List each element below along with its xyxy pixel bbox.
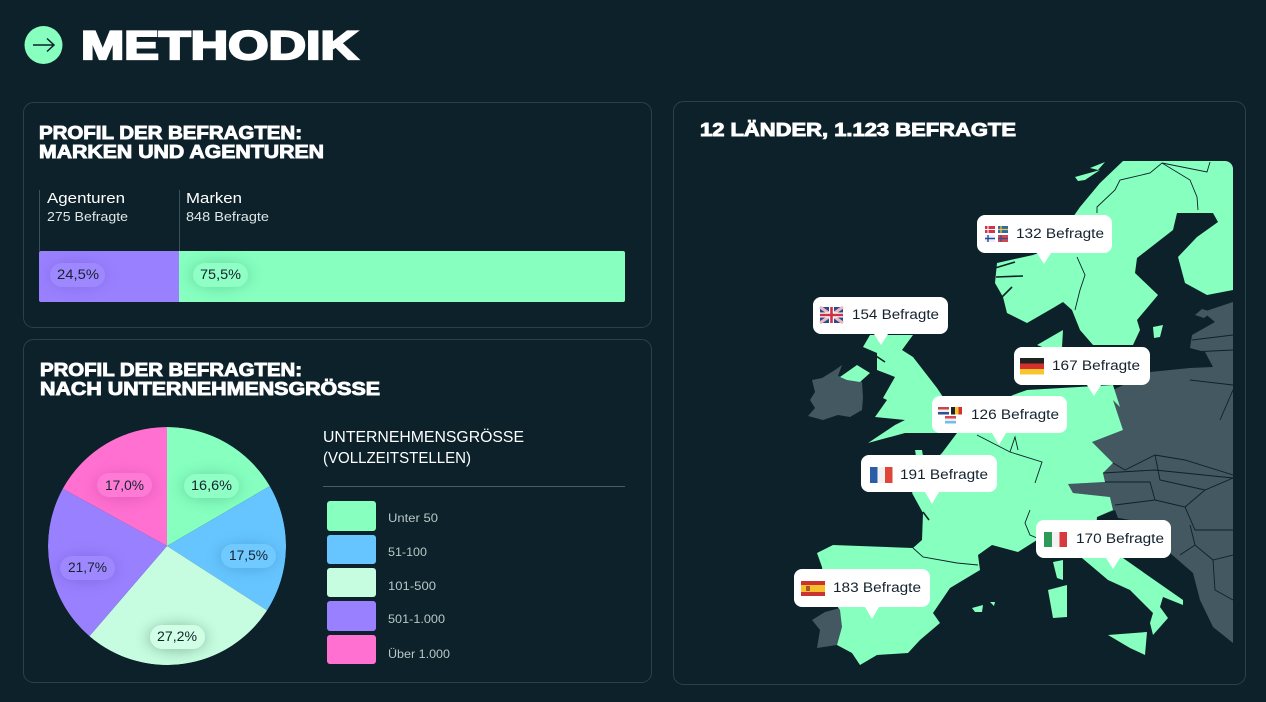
fjords and coastline inlets	[876, 262, 1023, 520]
legend	[323, 428, 625, 664]
value: 101-500: 27,2%	[157, 628, 197, 644]
legend item: 101-500: 101-500	[388, 579, 436, 593]
heading: company size	[40, 360, 380, 399]
panel: map	[674, 102, 1246, 684]
label: brands: Marken	[186, 190, 242, 207]
label: brands: 848 Befragte	[186, 209, 269, 224]
flag: Italy	[1044, 532, 1067, 547]
callout: Benelux	[932, 396, 1067, 445]
legend title	[323, 428, 625, 486]
panel: brands and agencies	[24, 102, 652, 328]
callout: Germany	[1014, 347, 1150, 396]
legend item: under 50: Unter 50	[388, 511, 438, 525]
callout: Nordics: 132 Befragte	[1016, 226, 1104, 241]
heading: brands and agencies: PROFIL DER BEFRAGTEN:	[39, 123, 302, 143]
panel: company size	[24, 340, 652, 682]
label: agencies: Agenturen	[47, 190, 125, 207]
callout: United Kingdom: 154 Befragte	[852, 307, 939, 322]
country borders	[913, 162, 1233, 600]
heading: brands and agencies	[39, 123, 324, 162]
legend title: (VOLLZEITSTELLEN)	[323, 450, 471, 467]
value: 501-1000	[60, 556, 115, 580]
label: agencies	[40, 190, 128, 251]
title: METHODIK	[81, 24, 358, 68]
dark sea north of Italy	[1098, 510, 1118, 518]
callout: France: 191 Befragte	[900, 467, 988, 482]
legend item: 51-100	[327, 535, 427, 564]
stacked bar chart	[39, 251, 625, 302]
label: brands	[180, 190, 269, 251]
flag: France	[870, 467, 892, 483]
surveyed countries	[817, 161, 1240, 665]
value: 501-1000: 21,7%	[68, 559, 107, 575]
legend item: 101-500	[327, 568, 436, 597]
callout: Spain	[794, 569, 930, 619]
callout: Italy: 170 Befragte	[1076, 531, 1164, 546]
value: 101-500	[150, 625, 205, 649]
map of Europe	[808, 161, 1240, 665]
value: over 1000: 17,0%	[105, 477, 144, 493]
heading: brands and agencies: MARKEN UND AGENTUREN	[39, 142, 324, 162]
callout: Germany: 167 Befragte	[1052, 358, 1140, 373]
flag: Spain	[801, 581, 825, 596]
value: over 1000	[97, 473, 152, 497]
value: agencies share: 24,5%	[57, 266, 99, 282]
legend item: 501-1000	[327, 601, 445, 631]
heading: company size: NACH UNTERNEHMENSGRÖSSE	[40, 379, 380, 399]
value: under 50: 16,6%	[191, 477, 232, 493]
pie chart	[48, 427, 286, 665]
value: 51-100	[221, 544, 276, 568]
heading: countries and respondents: 12 LÄNDER, 1.123 BEFRAGTE	[700, 120, 1016, 140]
value: 51-100: 17,5%	[229, 547, 268, 563]
heading: company size: PROFIL DER BEFRAGTEN:	[40, 360, 302, 380]
value: under 50	[184, 474, 239, 498]
flag: Germany	[1020, 358, 1044, 374]
icon: arrow in circle	[24, 26, 62, 64]
legend item: under 50	[327, 501, 438, 531]
legend title: UNTERNEHMENSGRÖSSE	[323, 428, 524, 446]
callout: France	[861, 455, 997, 504]
flags: Denmark, Sweden, Finland, Norway	[985, 226, 1008, 242]
legend item: 501-1000: 501-1.000	[388, 612, 445, 626]
callout: Italy	[1036, 520, 1171, 569]
flag: United Kingdom	[820, 307, 843, 323]
callout: Nordics	[977, 215, 1112, 264]
legend item: over 1000	[327, 635, 450, 664]
callout: United Kingdom	[813, 297, 948, 345]
flags: Netherlands, Belgium, Luxembourg	[938, 407, 962, 424]
callout: Benelux: 126 Befragte	[971, 407, 1059, 422]
non-surveyed countries	[808, 302, 1240, 650]
value: brands share: 75,5%	[200, 266, 241, 282]
label: agencies: 275 Befragte	[47, 209, 128, 224]
value: agencies share	[50, 263, 105, 287]
legend item: 51-100: 51-100	[388, 545, 427, 559]
value: brands share	[193, 263, 248, 287]
legend item: over 1000: Über 1.000	[388, 647, 450, 661]
callout: Spain: 183 Befragte	[833, 580, 921, 595]
